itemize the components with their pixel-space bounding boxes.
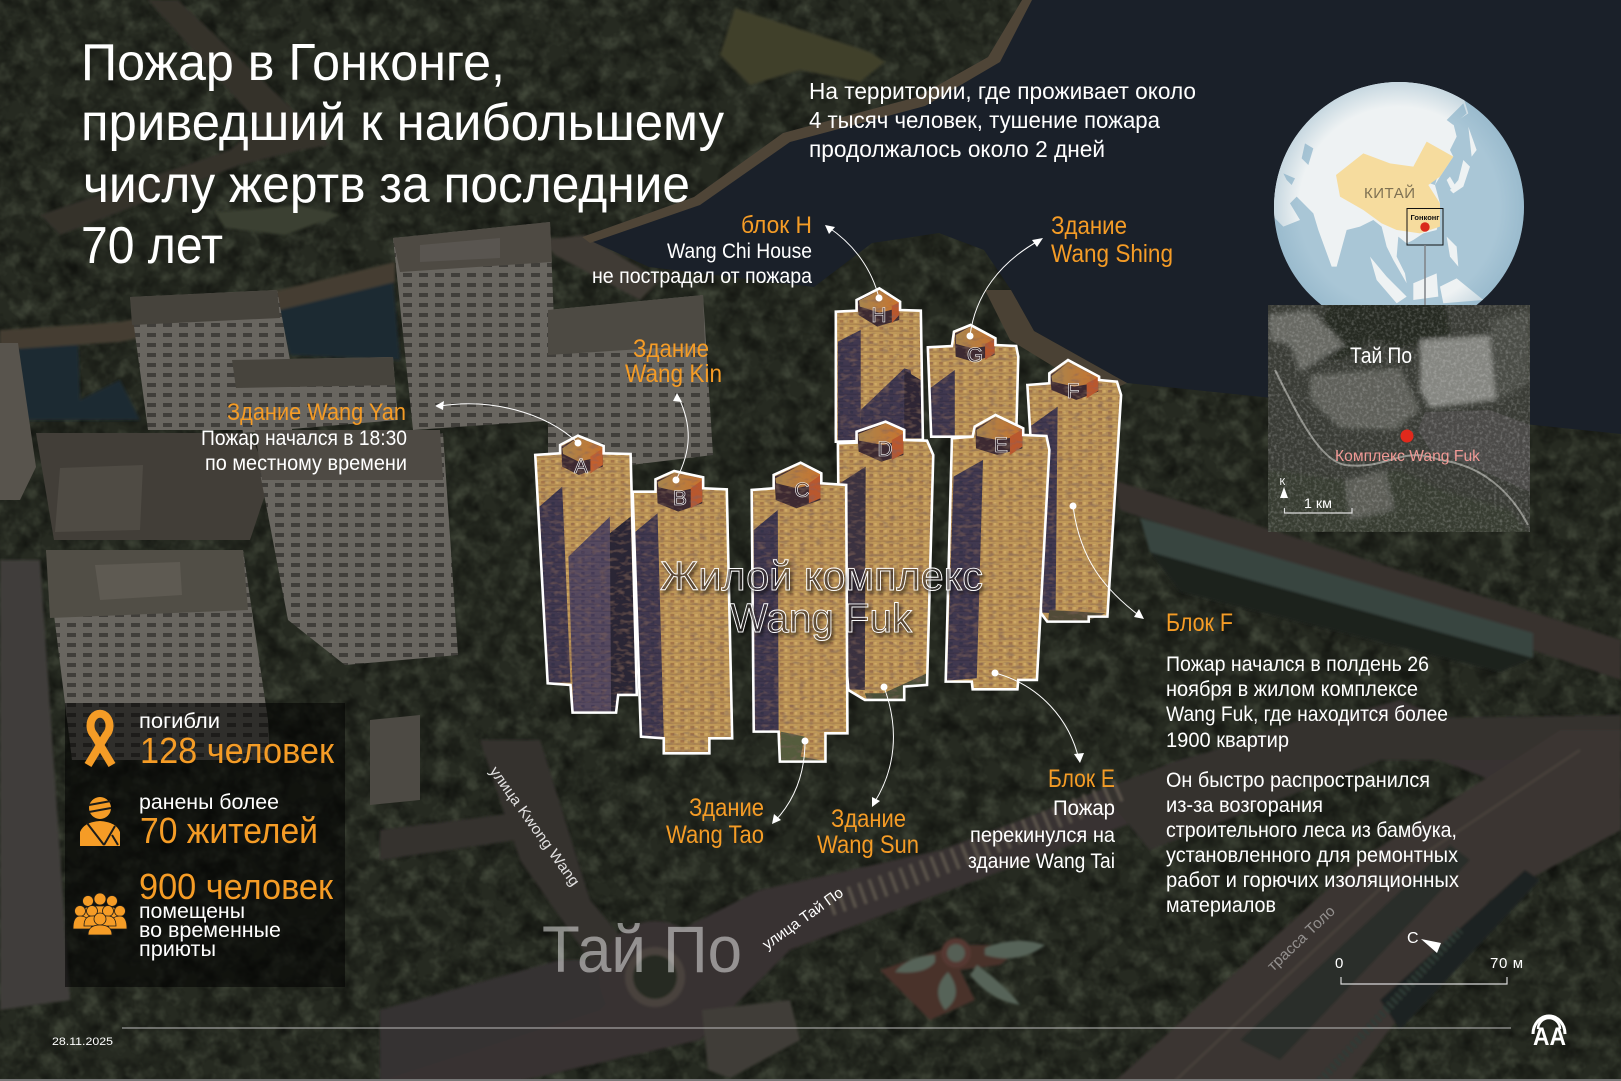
stat: killed: 128 человек (140, 730, 334, 771)
block F text: материалов (1166, 894, 1276, 917)
China label: КИТАЙ (1364, 184, 1415, 202)
label: Wang Yan (201, 399, 407, 475)
block F heading: Блок F (1166, 609, 1233, 637)
dark rooftop lower centre (702, 1000, 800, 1078)
title: Пожар в Гонконге, (81, 34, 505, 92)
north indicator: С (1407, 930, 1419, 947)
water (582, 0, 1621, 434)
complex name: Wang Fuk (730, 595, 912, 641)
block F text: установленного для ремонтных (1166, 844, 1458, 867)
label: block E: Пожар (1053, 797, 1115, 820)
tower E (946, 415, 1049, 689)
roundabout (599, 921, 711, 1033)
north arrow (1280, 478, 1288, 498)
logo: AA: AA (1533, 1023, 1566, 1051)
icon: ribbon (88, 714, 112, 765)
complex name: Жилой комплекс (660, 553, 983, 599)
block F text: ноября в жилом комплексе (1166, 678, 1418, 701)
label: Wang Kin (625, 335, 722, 388)
tower B (633, 471, 732, 753)
label: Wang Tao: Здание (689, 794, 764, 822)
icon: crowd (73, 893, 127, 935)
leader arrows (435, 225, 1144, 824)
icon: injured person (80, 797, 120, 846)
tower D (838, 422, 933, 700)
label: block H: не пострадал от пожара (592, 265, 812, 288)
label: Wang Shing: Здание (1051, 212, 1127, 240)
intro text: продолжалось около 2 дней (809, 136, 1105, 162)
stat: sheltered (139, 866, 333, 961)
label: block H: блок Н (741, 212, 812, 239)
label: block E: перекинулся на (970, 824, 1115, 847)
street labels: трасса Толо (1264, 903, 1339, 975)
label: Wang Kin: Здание (633, 335, 709, 363)
river left (18, 340, 140, 420)
date: 28.11.2025 (52, 1036, 113, 1048)
block F text: из-за возгорания (1166, 794, 1323, 817)
complex marker (1400, 430, 1414, 442)
inset scale bar: 1 км (1304, 495, 1332, 511)
label: Wang Shing (1051, 212, 1173, 268)
inset place name: Тай По (1350, 343, 1412, 368)
noise barrier (1150, 552, 1533, 672)
scale bar: 70 м (1490, 955, 1523, 972)
tower letters: G (967, 344, 983, 367)
label: Wang Yan: Пожар начался в 18:30 (201, 427, 407, 450)
label: Wang Sun: Wang Sun (817, 831, 919, 859)
scale bar (1335, 955, 1523, 984)
label: block E (968, 765, 1115, 873)
locator globe (1274, 82, 1524, 305)
label: Wang Sun (817, 805, 919, 859)
tower letters: B (673, 487, 687, 510)
complex label: Комплекс Wang Fuk (1335, 448, 1481, 465)
China (1336, 142, 1453, 233)
block F text: Wang Fuk, где находится более (1166, 703, 1448, 726)
highlighted towers of Wang Fuk complex (535, 288, 1121, 762)
district name: Тай По (542, 912, 742, 986)
stat: sheltered: помещены (139, 900, 245, 923)
tower C (752, 463, 847, 762)
label: Wang Kin: Wang Kin (625, 360, 722, 388)
stat: injured (139, 791, 318, 851)
title: числу жертв за последние (83, 156, 690, 214)
Hong Kong label: Гонконг (1411, 213, 1439, 222)
inset satellite map (1268, 300, 1530, 535)
street labels (486, 763, 1339, 975)
block F text: Он быстро распространился (1166, 769, 1430, 792)
label: Wang Tao: Wang Tao (666, 821, 764, 849)
grey residential towers (393, 222, 558, 430)
tower letters: C (794, 479, 810, 502)
label: Wang Sun: Здание (831, 805, 906, 833)
tower letters: E (994, 434, 1008, 457)
road corridor behind complex (1113, 480, 1621, 680)
bottom left roads (0, 560, 70, 1010)
block F text: работ и горючих изоляционных (1166, 869, 1459, 892)
label: Wang Yan: Здание Wang Yan (227, 399, 406, 426)
tower F (1027, 360, 1121, 622)
label: Wang Tao (666, 794, 764, 849)
street labels: улица Тай По (759, 884, 847, 953)
tower letters: F (1067, 380, 1079, 403)
block F text: 1900 квартир (1166, 729, 1289, 752)
lower road bands (380, 700, 1621, 1081)
Hong Kong locator box (1407, 208, 1443, 245)
intro text: 4 тысяч человек, тушение пожара (809, 107, 1160, 133)
title: приведший к наибольшему (81, 94, 724, 152)
label: block H (592, 212, 812, 288)
label: block E: здание Wang Tai (968, 850, 1115, 873)
tower A (535, 436, 637, 713)
tower letters: A (574, 455, 588, 478)
inset scale bar (1284, 498, 1353, 514)
block F text (1166, 653, 1459, 917)
top-left road (40, 0, 330, 235)
block F text: Пожар начался в полдень 26 (1166, 653, 1429, 676)
garden (880, 945, 1025, 1020)
park lawn (720, 8, 885, 85)
stat: killed (139, 710, 334, 771)
stat: killed: погибли (139, 710, 220, 733)
stat: sheltered: 900 человек (139, 866, 333, 907)
stat: sheltered: во временные (139, 919, 281, 942)
stat: sheltered: приюты (139, 938, 216, 961)
title (81, 34, 724, 275)
intro text (809, 78, 1196, 162)
Hong Kong marker (1420, 222, 1430, 232)
stat: injured: ранены более (139, 791, 279, 814)
Eurasian land (1263, 70, 1483, 303)
north indicator (1407, 930, 1441, 953)
north arrow: К (1280, 477, 1286, 488)
tower G (928, 325, 1018, 437)
label: block H: Wang Chi House (667, 240, 812, 263)
title: 70 лет (81, 217, 223, 275)
tower letters: H (871, 304, 887, 327)
label: Wang Yan: по местному времени (205, 452, 407, 475)
stat: injured: 70 жителей (140, 810, 318, 851)
tower letters (574, 304, 1079, 510)
block F text: строительного леса из бамбука, (1166, 819, 1457, 842)
complex name (660, 553, 983, 641)
tower H (836, 288, 923, 442)
label: Wang Shing: Wang Shing (1051, 240, 1173, 268)
scale bar: 0 (1335, 955, 1343, 972)
street labels: улица Kwong Wang (486, 763, 583, 890)
intro text: На территории, где проживает около (809, 78, 1196, 104)
highway fan (1115, 730, 1621, 1081)
panel: casualty statistics (65, 703, 345, 987)
tower letters: D (877, 438, 893, 461)
label: block E: Блок Е (1048, 765, 1115, 793)
